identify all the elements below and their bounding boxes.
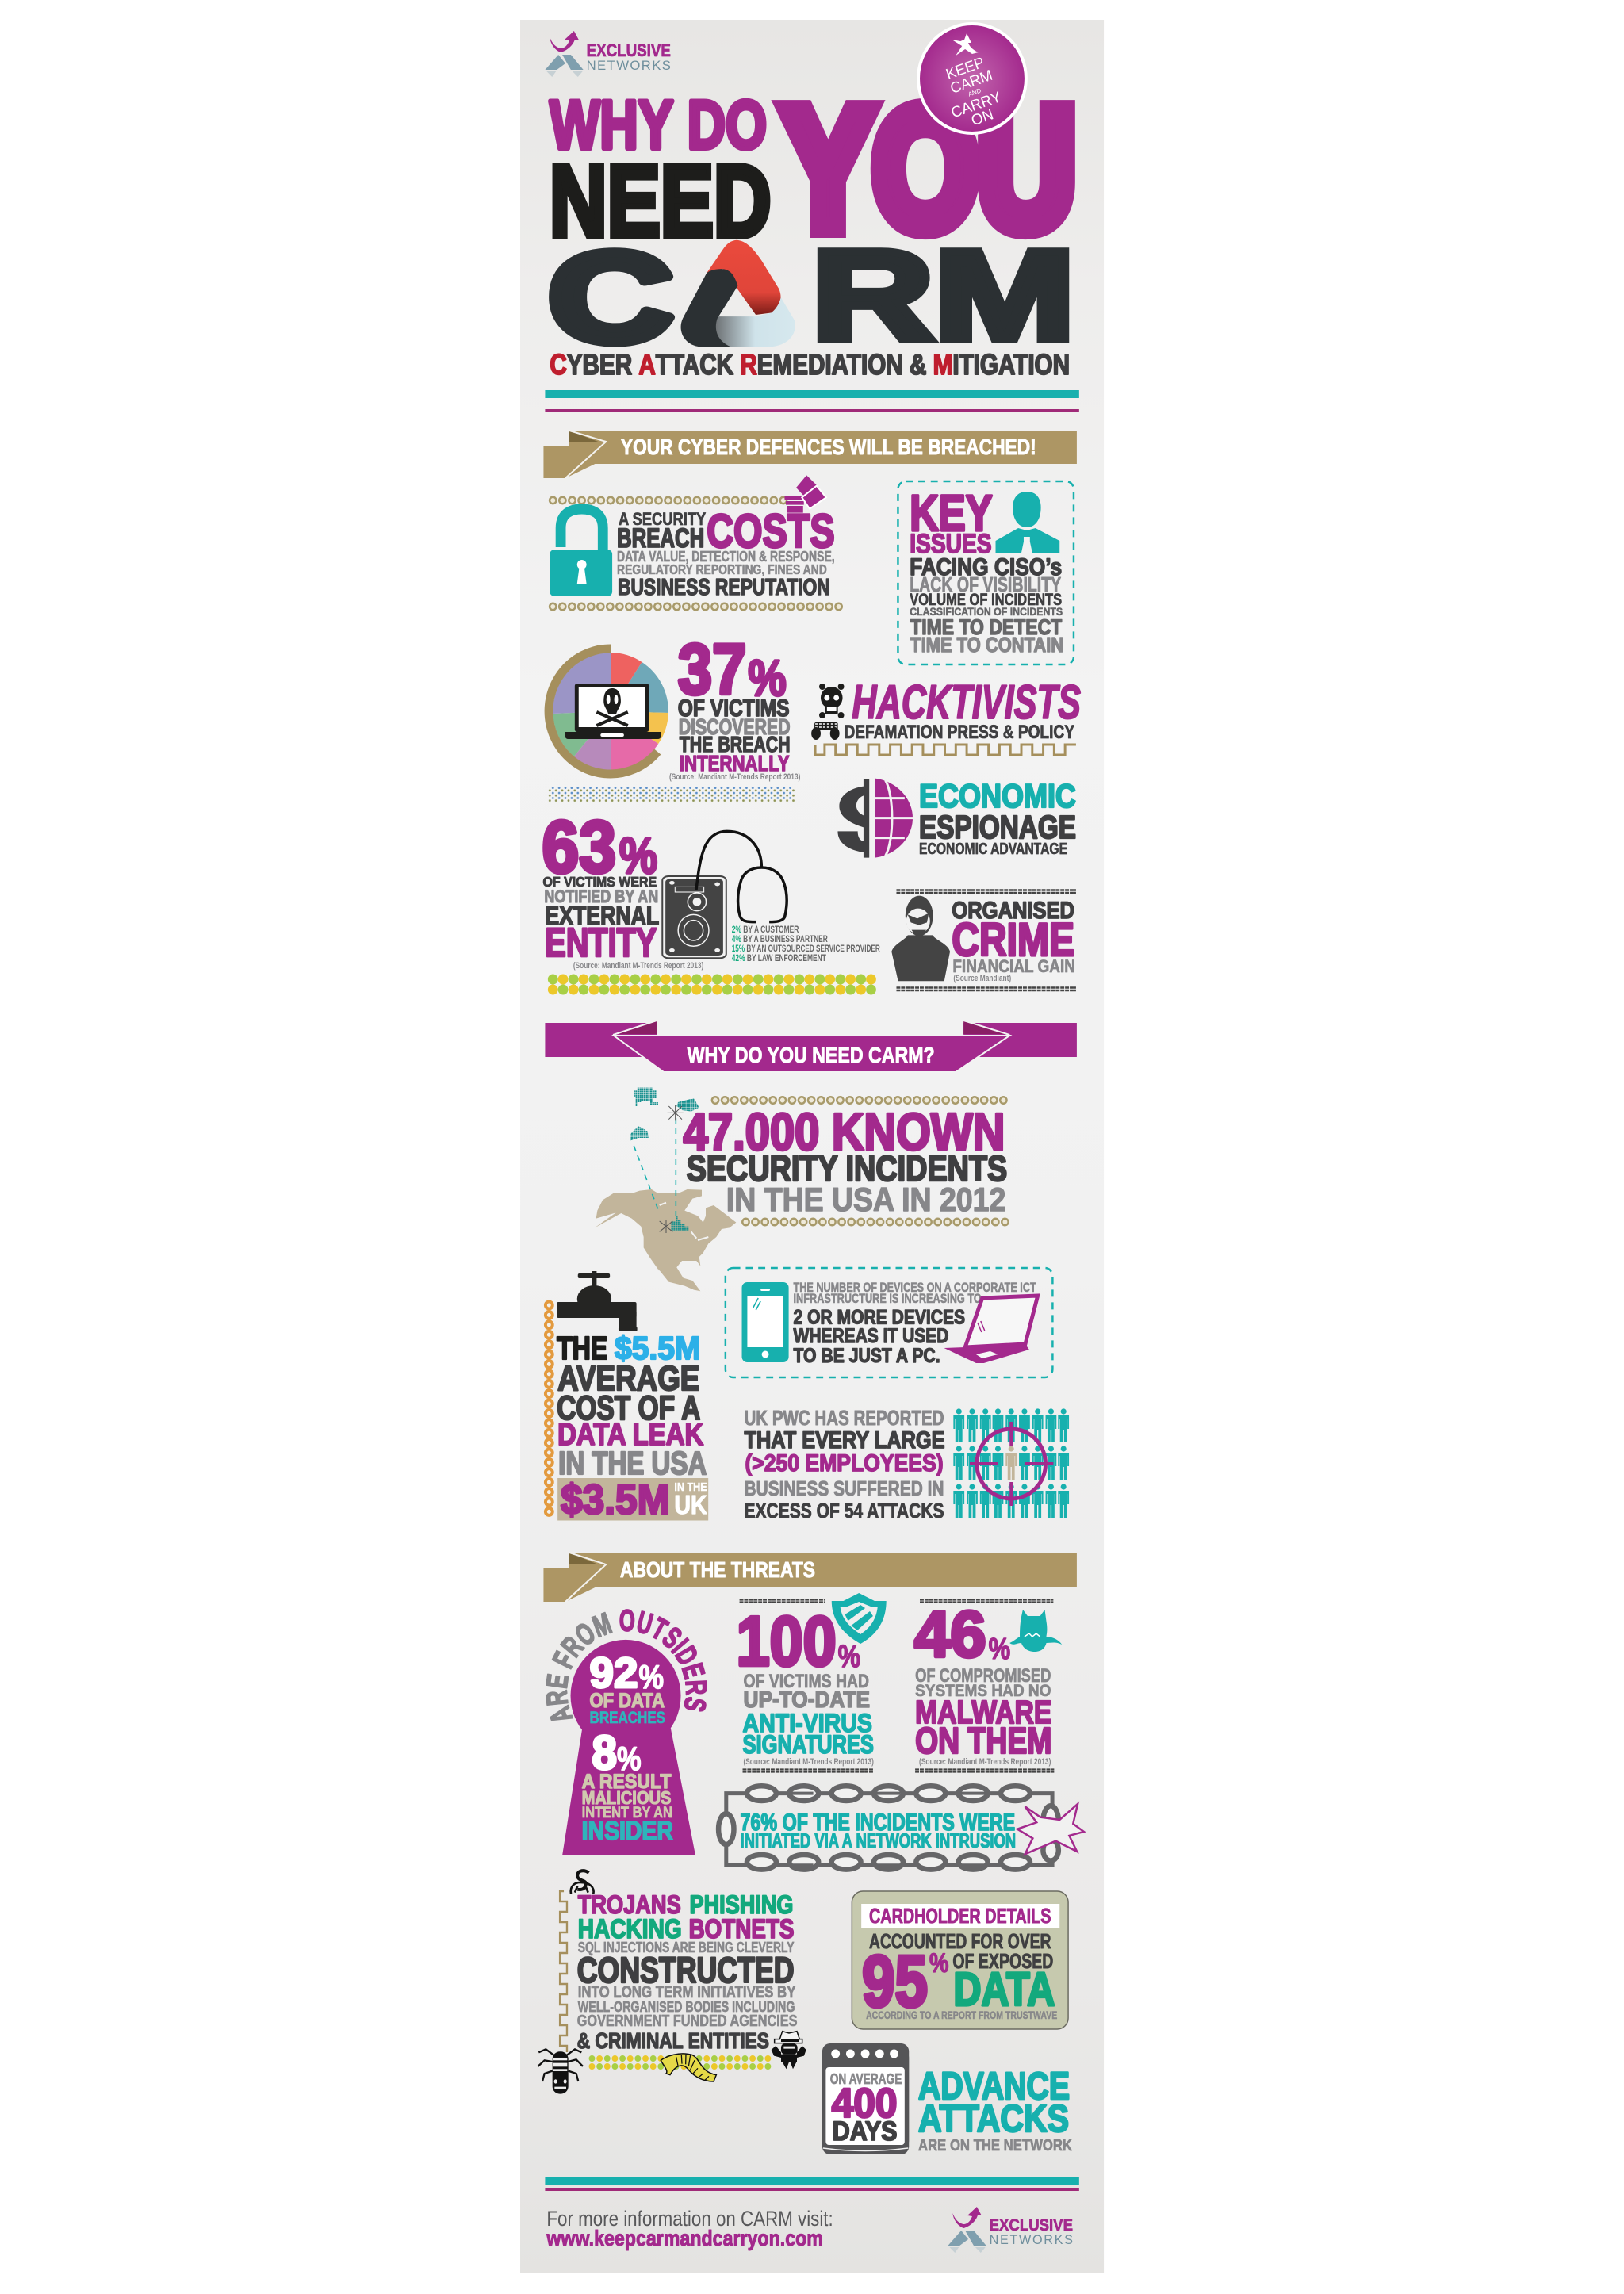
icon: skull and crossbones <box>819 684 845 718</box>
breach cost text: A SECURITY <box>619 509 707 529</box>
panel: organised crime: ORGANISED <box>952 898 1074 924</box>
stat: 37 percent: THE BREACH <box>680 732 791 756</box>
icon: bug <box>538 2049 583 2094</box>
icon: chain frame <box>718 1786 1059 1870</box>
panel: key issues: ISSUES <box>910 529 992 559</box>
badge lettering: ON <box>969 105 995 128</box>
panel: threats list: & CRIMINAL ENTITIES <box>577 2028 769 2053</box>
breach cost text <box>617 506 835 600</box>
panel: threats list: SQL INJECTIONS ARE BEING CLEVERLY <box>578 1939 794 1955</box>
panel: threats list: TROJANS <box>578 1890 681 1919</box>
panel: threats list: WELL-ORGANISED BODIES INCLUDING <box>578 1998 795 2015</box>
panel: organised crime <box>891 890 1076 990</box>
panel: 46 percent no malware: MALWARE <box>915 1694 1051 1730</box>
panel: cardholder details: ACCORDING TO A REPORT FROM TRUSTWAVE <box>866 2009 1057 2021</box>
stat: 63 percent: EXTERNAL <box>545 901 659 930</box>
breach cost text: BREACH <box>617 523 704 553</box>
footer logo wordmark: NETWORKS <box>990 2233 1073 2247</box>
panel: organised crime: FINANCIAL GAIN <box>952 956 1075 976</box>
panel: economic espionage: ECONOMIC ADVANTAGE <box>919 841 1067 858</box>
panel: cardholder details: % <box>929 1948 948 1978</box>
panel: cost of a data leak: IN THE USA <box>558 1445 707 1481</box>
panel: background sheet <box>520 20 1104 2273</box>
panel: 100 percent anti-virus: OF VICTIMS HAD <box>743 1671 869 1692</box>
icon: people grid with target <box>953 1408 1069 1518</box>
stat: 37 percent: 37 <box>678 629 746 709</box>
banner: why do you need carm: WHY DO YOU NEED CARM? <box>688 1043 935 1067</box>
badge lettering: AND <box>967 86 982 98</box>
panel: 46 percent no malware: 46 <box>914 1597 986 1671</box>
panel: cardholder details <box>852 1891 1068 2029</box>
panel: keyhole outsiders and insiders: OF DATA <box>590 1691 665 1712</box>
text: advance attacks: ATTACKS <box>918 2098 1069 2140</box>
panel: 400 days calendar: DAYS <box>833 2116 897 2147</box>
stat: 63 percent: 63 <box>542 805 616 888</box>
icon: money and coins <box>784 475 826 513</box>
panel: cost of a data leak: THE <box>557 1330 607 1366</box>
key issues list: TIME TO CONTAIN <box>910 634 1063 657</box>
icon: footer logo mark <box>948 2207 986 2253</box>
stat: 37 percent: % <box>748 651 787 707</box>
panel: keyhole outsiders and insiders: A RESULT <box>582 1771 671 1793</box>
icon: worm <box>661 2054 716 2081</box>
text: who notified victims <box>732 925 880 963</box>
panel: 47,000 known incidents: SECURITY INCIDENTS <box>687 1150 1007 1189</box>
panel: hacktivists: DEFAMATION PRESS & POLICY <box>845 722 1074 743</box>
badge lettering: CARM <box>948 67 994 97</box>
panel: keyhole outsiders and insiders: % <box>639 1658 664 1695</box>
icon: masked criminal <box>891 896 950 981</box>
logo: Exclusive Networks <box>545 31 671 77</box>
panel: devices: 2 OR MORE DEVICES <box>794 1307 965 1329</box>
icon: CARM triangle A <box>681 240 795 347</box>
badge lettering: CARRY <box>949 88 1003 121</box>
icon: badge logo <box>952 33 979 56</box>
panel: cost of a data leak <box>549 1271 708 1523</box>
icon: laptop with skull <box>565 684 661 739</box>
panel: 400 days calendar <box>822 2043 909 2154</box>
breach cost text: REGULATORY REPORTING, FINES AND <box>617 561 827 577</box>
stat: 37 percent: (Source: Mandiant M-Trends Report 2013) <box>669 772 801 782</box>
title line: need: NEED <box>550 144 772 259</box>
footer logo wordmark <box>990 2216 1073 2247</box>
panel: 47,000 known incidents: IN THE USA IN 2012 <box>726 1181 1005 1218</box>
icon: shield <box>832 1593 887 1644</box>
panel: chain and 76 percent: INITIATED VIA A NETWORK INTRUSION <box>741 1831 1016 1852</box>
title line: why do: WHY DO <box>550 87 767 163</box>
curved caption: ARE FROM OUTSIDERS <box>546 1609 707 1721</box>
text: who notified victims: 15% BY AN OUTSOURCED SERVICE PROVIDER <box>732 944 880 954</box>
panel: devices: WHEREAS IT USED <box>794 1326 948 1347</box>
banner: your cyber defences: YOUR CYBER DEFENCES WILL BE BREACHED! <box>621 435 1036 459</box>
stat: 37 percent: DISCOVERED <box>679 714 791 739</box>
panel: devices: TO BE JUST A PC. <box>794 1346 940 1367</box>
panel: UK PwC attacks <box>744 1407 1069 1522</box>
logo wordmark <box>587 40 671 73</box>
panel: keyhole outsiders and insiders: 8 <box>592 1726 617 1779</box>
banner: your cyber defences <box>543 431 1077 478</box>
key issues list <box>910 554 1063 657</box>
text: who notified victims: 4% BY A BUSINESS PARTNER <box>732 935 828 944</box>
panel: 400 days calendar: 400 <box>832 2080 897 2126</box>
stat: 63 percent: OF VICTIMS WERE <box>542 874 657 890</box>
footer text: For more information on CARM visit: <box>546 2207 833 2231</box>
panel: cardholder details: OF EXPOSED <box>952 1951 1053 1973</box>
stat: 63 percent: NOTIFIED BY AN <box>544 887 658 906</box>
text: advance attacks: ARE ON THE NETWORK <box>918 2137 1073 2154</box>
banner: why do you need carm <box>545 1021 1077 1072</box>
key issues list: LACK OF VISIBILITY <box>910 574 1061 596</box>
chart: pie with laptop <box>549 649 668 774</box>
panel: keyhole outsiders and insiders: 92 <box>590 1649 638 1697</box>
key issues list: FACING CISO’s <box>910 554 1062 580</box>
panel: organised crime: (Source Mandiant) <box>953 974 1011 983</box>
panel: security breach costs <box>550 475 841 607</box>
panel: threats list: HACKING <box>578 1914 682 1944</box>
panel: cardholder details: CARDHOLDER DETAILS <box>869 1905 1051 1928</box>
panel: 400 days calendar: ON AVERAGE <box>830 2070 902 2087</box>
panel: organised crime: CRIME <box>952 915 1074 966</box>
panel: cardholder details: DATA <box>953 1964 1055 2016</box>
panel: 100 percent anti-virus: UP-TO-DATE <box>743 1687 870 1713</box>
panel: cost of a data leak: UK <box>674 1490 707 1519</box>
panel: 47,000 known incidents <box>595 1088 1007 1291</box>
icon: hat spy <box>772 2032 806 2069</box>
logo wordmark: EXCLUSIVE <box>587 40 671 60</box>
text: advance attacks <box>918 2066 1073 2154</box>
panel: UK PwC attacks: (>250 EMPLOYEES) <box>745 1450 944 1476</box>
panel: cost of a data leak: IN THE <box>674 1481 707 1494</box>
panel: economic espionage: ESPIONAGE <box>919 809 1076 845</box>
icon: keyboard hands <box>811 722 840 740</box>
panel: economic espionage: ECONOMIC <box>919 777 1076 814</box>
panel: threats list: CONSTRUCTED <box>577 1951 794 1990</box>
panel: 100 percent anti-virus: % <box>838 1639 860 1674</box>
badge lettering: KEEP <box>944 54 986 82</box>
icon: person in suit <box>996 492 1059 553</box>
panel: key issues <box>898 481 1074 664</box>
panel: 100 percent anti-virus <box>737 1593 887 1771</box>
title word: you: YOU <box>783 75 1075 264</box>
panel: cardholder details: ACCOUNTED FOR OVER <box>869 1931 1051 1953</box>
icon: padlock <box>550 509 612 596</box>
panel: keyhole outsiders and insiders: MALICIOUS <box>582 1787 671 1808</box>
panel: keyhole outsiders and insiders: INSIDER <box>582 1816 673 1845</box>
icon: burst <box>1017 1804 1084 1854</box>
panel: cost of a data leak: DATA LEAK <box>557 1418 703 1452</box>
banner: about the threats: ABOUT THE THREATS <box>620 1557 815 1582</box>
panel: hacktivists: HACKTIVISTS <box>852 676 1081 729</box>
panel: chain and 76 percent <box>718 1786 1084 1870</box>
panel: 46 percent no malware: (Source: Mandiant M-Trends Report 2013) <box>919 1757 1051 1767</box>
panel: UK PwC attacks: UK PWC HAS REPORTED <box>744 1407 944 1430</box>
panel: cost of a data leak: AVERAGE <box>557 1360 699 1398</box>
icon: north america map with invaders <box>595 1088 736 1291</box>
logo wordmark: NETWORKS <box>587 58 671 73</box>
footer logo <box>948 2207 1073 2253</box>
panel: threats list: INTO LONG TERM INITIATIVES BY <box>578 1982 795 2001</box>
title word: C: C <box>548 226 673 368</box>
title word: RM: RM <box>811 224 1075 366</box>
panel: 100 percent anti-virus: SIGNATURES <box>743 1730 874 1759</box>
icon: dollar globe <box>837 779 913 858</box>
panel: devices <box>726 1268 1052 1377</box>
panel: threats list: PHISHING <box>690 1890 794 1919</box>
key issues list: TIME TO DETECT <box>910 615 1063 639</box>
stat: 37 percent: OF VICTIMS <box>678 695 790 722</box>
icon: scorpion <box>571 1871 594 1894</box>
icon: monster <box>1009 1610 1062 1652</box>
panel: hacktivists <box>811 676 1081 755</box>
breach cost text: DATA VALUE, DETECTION & RESPONSE, <box>617 548 835 565</box>
banner: about the threats <box>543 1553 1077 1602</box>
badge: keep carm and carry on <box>918 24 1026 133</box>
stat: 63 percent: (Source: Mandiant M-Trends Report 2013) <box>573 961 704 971</box>
stat: 63 percent: ENTITY <box>545 920 657 965</box>
panel: economic espionage <box>837 777 1076 858</box>
panel: devices: THE NUMBER OF DEVICES ON A CORPORATE ICT <box>794 1281 1036 1295</box>
panel: 46 percent no malware: % <box>989 1632 1010 1665</box>
panel: cost of a data leak: $3.5M <box>561 1476 670 1523</box>
panel: UK PwC attacks: BUSINESS SUFFERED IN <box>744 1478 944 1500</box>
text: advance attacks: ADVANCE <box>918 2066 1070 2108</box>
icon: smartphone <box>742 1282 789 1362</box>
panel: threats list <box>538 1871 806 2094</box>
key issues list: CLASSIFICATION OF INCIDENTS <box>910 605 1063 618</box>
panel: 100 percent anti-virus: (Source: Mandiant M-Trends Report 2013) <box>743 1757 874 1767</box>
panel: threats list: BOTNETS <box>689 1914 794 1944</box>
infographic sheet <box>520 20 1104 2273</box>
stat: 63 percent <box>542 805 704 971</box>
panel: 46 percent no malware: OF COMPROMISED <box>915 1665 1051 1687</box>
panel: devices: INFRASTRUCTURE IS INCREASING TO <box>794 1292 982 1306</box>
text: who notified victims: 2% BY A CUSTOMER <box>732 925 799 935</box>
panel: chain and 76 percent: 76% OF THE INCIDENTS WERE <box>741 1810 1015 1836</box>
icon: hard drive and stethoscope <box>662 831 787 958</box>
icon: logo mark <box>545 31 584 77</box>
panel: UK PwC attacks: EXCESS OF 54 ATTACKS <box>744 1500 944 1522</box>
footer text: www.keepcarmandcarryon.com <box>546 2226 823 2250</box>
panel: 46 percent no malware <box>914 1597 1062 1771</box>
panel: keyhole outsiders and insiders: % <box>617 1740 642 1777</box>
key issues list: VOLUME OF INCIDENTS <box>910 591 1062 609</box>
panel: keyhole outsiders and insiders: INTENT BY AN <box>582 1804 672 1821</box>
breach cost text: BUSINESS REPUTATION <box>618 575 830 600</box>
panel: UK PwC attacks: THAT EVERY LARGE <box>744 1427 945 1453</box>
panel: cost of a data leak: COST OF A <box>557 1389 700 1427</box>
panel: threats list: GOVERNMENT FUNDED AGENCIES <box>577 2013 797 2030</box>
stat: 37 percent <box>669 629 801 782</box>
footer text <box>546 2207 833 2250</box>
panel: 47,000 known incidents: 47.000 KNOWN <box>684 1103 1005 1161</box>
panel: cardholder details: 95 <box>862 1940 928 2022</box>
panel: 100 percent anti-virus: 100 <box>737 1602 837 1680</box>
panel: cost of a data leak: $5.5M <box>615 1330 700 1366</box>
title: why do you need CARM <box>548 75 1075 368</box>
panel: key issues: KEY <box>910 486 993 542</box>
badge lettering <box>944 54 1003 128</box>
icon: laptop <box>944 1296 1038 1363</box>
icon: dripping tap <box>557 1271 638 1331</box>
panel: keyhole outsiders and insiders: BREACHES <box>590 1708 665 1727</box>
text: who notified victims: 42% BY LAW ENFORCEMENT <box>732 954 826 963</box>
subtitle: CYBER ATTACK REMEDIATION & MITIGATION <box>550 348 1070 381</box>
stat: 37 percent: INTERNALLY <box>680 751 790 776</box>
panel: keyhole outsiders and insiders <box>546 1609 707 1855</box>
stat: 63 percent: % <box>619 829 657 884</box>
panel: 100 percent anti-virus: ANTI-VIRUS <box>743 1709 872 1737</box>
panel: 46 percent no malware: ON THEM <box>915 1721 1051 1761</box>
footer logo wordmark: EXCLUSIVE <box>990 2216 1073 2235</box>
panel: 46 percent no malware: SYSTEMS HAD NO <box>915 1681 1051 1700</box>
breach cost text: COSTS <box>707 506 835 557</box>
